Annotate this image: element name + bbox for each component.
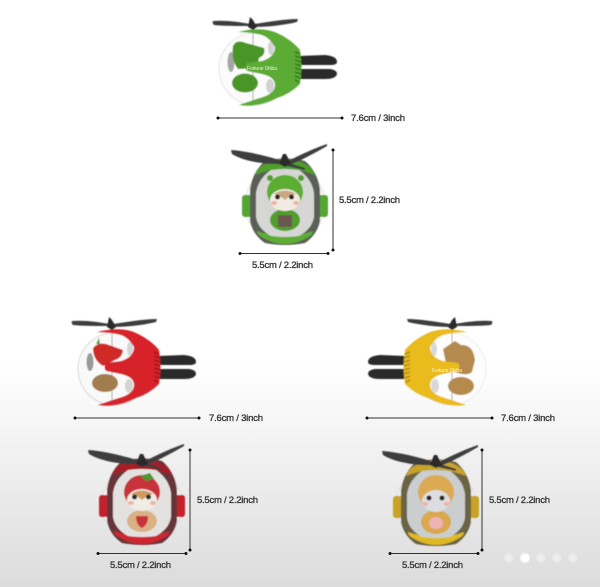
product: yellow side view (368, 317, 492, 406)
dimension: yellow width front (388, 552, 480, 571)
dimension: red width front: 5.5cm / 2.2inch (110, 560, 171, 571)
dimension: green height: 5.5cm / 2.2inch (339, 195, 400, 206)
icon: vent ribs (154, 352, 160, 382)
dimension: green width front (238, 252, 330, 271)
dimension: red width (74, 413, 263, 424)
icon: vent ribs (295, 52, 301, 82)
product: green front view (231, 144, 328, 245)
icon: strawberry-hood shiba (124, 473, 160, 532)
dimension: yellow width front: 5.5cm / 2.2inch (402, 560, 463, 571)
dimension: red width front (96, 552, 188, 571)
icon: tiger-hood shiba (418, 475, 454, 534)
icon: frog-hood shiba (267, 175, 304, 231)
dimension: red height: 5.5cm / 2.2inch (197, 495, 258, 506)
icon: dome outline (102, 464, 182, 544)
product: yellow front view (382, 445, 479, 546)
icon: side ears (99, 495, 111, 517)
icon: dome outline (245, 164, 325, 244)
dimension: green width (216, 113, 405, 124)
icon: dome (78, 333, 150, 405)
icon: window (113, 469, 171, 537)
dimension: yellow height: 5.5cm / 2.2inch (489, 495, 550, 506)
icon: dome (414, 333, 486, 405)
icon: side ears (393, 496, 405, 518)
icon: dome (219, 33, 291, 105)
dimension: red height (188, 448, 258, 552)
dimension: yellow width: 7.6cm / 3inch (501, 413, 555, 424)
icon: dome outline (396, 465, 476, 545)
product: red side view (72, 317, 196, 406)
icon: housing ring (250, 158, 320, 245)
dimension: green width front: 5.5cm / 2.2inch (252, 260, 313, 271)
icon: window (256, 169, 314, 237)
product: red front view (88, 444, 185, 545)
dimension: red width: 7.6cm / 3inch (209, 413, 263, 424)
carousel pagination dots (504, 553, 578, 563)
icon: figure seen from the side (431, 333, 475, 401)
icon: vent ribs (404, 352, 410, 382)
dimension: green width: 7.6cm / 3inch (351, 113, 405, 124)
icon: figure seen from the side (86, 333, 133, 401)
icon: housing ring (107, 458, 177, 545)
dimension: yellow width (366, 413, 555, 424)
brand label: green: Fortune Shiba (247, 66, 277, 72)
icon: window (407, 470, 465, 538)
dimension: yellow height (480, 448, 550, 552)
icon: side ears (242, 195, 254, 217)
product: green side view (213, 17, 337, 106)
icon: figure seen from the side (228, 33, 274, 101)
brand label: yellow: Fortune Shiba (432, 368, 462, 374)
icon: housing ring (401, 460, 471, 546)
dimension: green height (332, 148, 400, 252)
